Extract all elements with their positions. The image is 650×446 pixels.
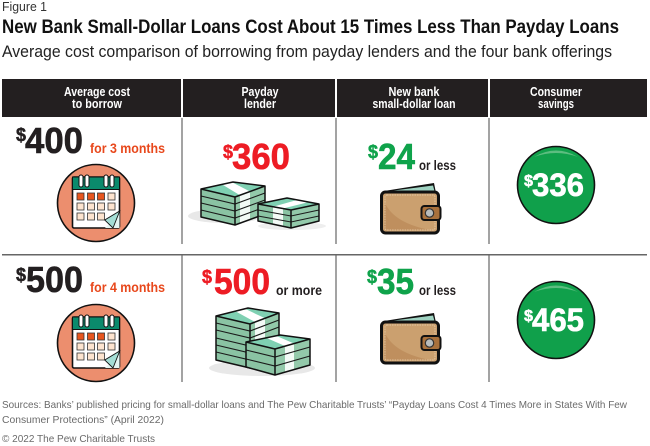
amount $35: 35: [377, 261, 414, 302]
icon: wallet: [382, 183, 440, 233]
amount $400: 400: [25, 120, 83, 161]
icon: calendar: [58, 164, 134, 242]
header: new bank small-dollar loan: New bank: [388, 85, 440, 99]
sources note: Sources: Banks’ published pricing for small-dollar loans and The Pew Charitable Trusts’ “Payday Loans Cost 4 Times More in States With Few: [2, 399, 627, 411]
sources note: [2, 399, 627, 426]
amount $500: $: [202, 267, 212, 287]
qualifier: or less: [419, 157, 456, 173]
subtitle: Average cost comparison of borrowing from payday lenders and the four bank offerings: [2, 42, 612, 61]
table header row: [2, 79, 647, 117]
amount $360: $: [223, 142, 233, 162]
amount $35: $: [367, 267, 377, 287]
row 1: bank loan $24 or less: [368, 136, 456, 233]
copyright: © 2022 The Pew Charitable Trusts: [2, 433, 155, 445]
icon: money stacks: [188, 182, 326, 230]
header: payday lender: Payday: [242, 85, 279, 99]
row 1: savings badge $336: 336: [532, 167, 584, 203]
duration: for 4 months: [90, 279, 165, 295]
amount $500: $: [16, 265, 26, 285]
amount $400: $: [16, 125, 26, 145]
amount $500: 500: [26, 259, 83, 300]
row 2: bank loan $35 or less: [367, 261, 456, 363]
row 2: $500 for 4 months: [16, 259, 165, 382]
qualifier: or less: [419, 282, 456, 298]
header: average cost to borrow: Average cost: [64, 85, 131, 99]
header: consumer savings: Consumer: [530, 85, 582, 99]
row 2: savings badge $465: $: [524, 308, 533, 325]
amount $24: 24: [378, 136, 415, 177]
row 2: payday lender $500 or more: [202, 261, 322, 376]
duration: for 3 months: [90, 140, 165, 156]
header: payday lender: [183, 79, 335, 117]
header: consumer savings: [490, 79, 647, 117]
header: new bank small-dollar loan: small-dollar loan: [372, 97, 456, 111]
header: new bank small-dollar loan: [337, 79, 488, 117]
sources note: Consumer Protections” (April 2022): [2, 414, 164, 426]
amount $360: 360: [232, 136, 290, 177]
icon: money stacks: [209, 308, 315, 376]
header: average cost to borrow: [2, 79, 181, 117]
row 1: $400 for 3 months: [16, 120, 165, 242]
amount $24: $: [368, 142, 378, 162]
icon: calendar: [58, 304, 134, 382]
qualifier: or more: [276, 282, 322, 298]
amount $500: 500: [214, 261, 270, 302]
row 1: savings badge $336: [518, 146, 594, 224]
icon: wallet: [382, 313, 440, 363]
row 2: savings badge $465: 465: [532, 302, 584, 338]
header: payday lender: lender: [244, 97, 276, 111]
header: average cost to borrow: to borrow: [72, 97, 122, 111]
row 2: savings badge $465: [518, 282, 594, 358]
row 1: payday lender $360: [188, 136, 326, 230]
row 1: savings badge $336: $: [524, 173, 533, 190]
header: consumer savings: savings: [538, 97, 574, 111]
